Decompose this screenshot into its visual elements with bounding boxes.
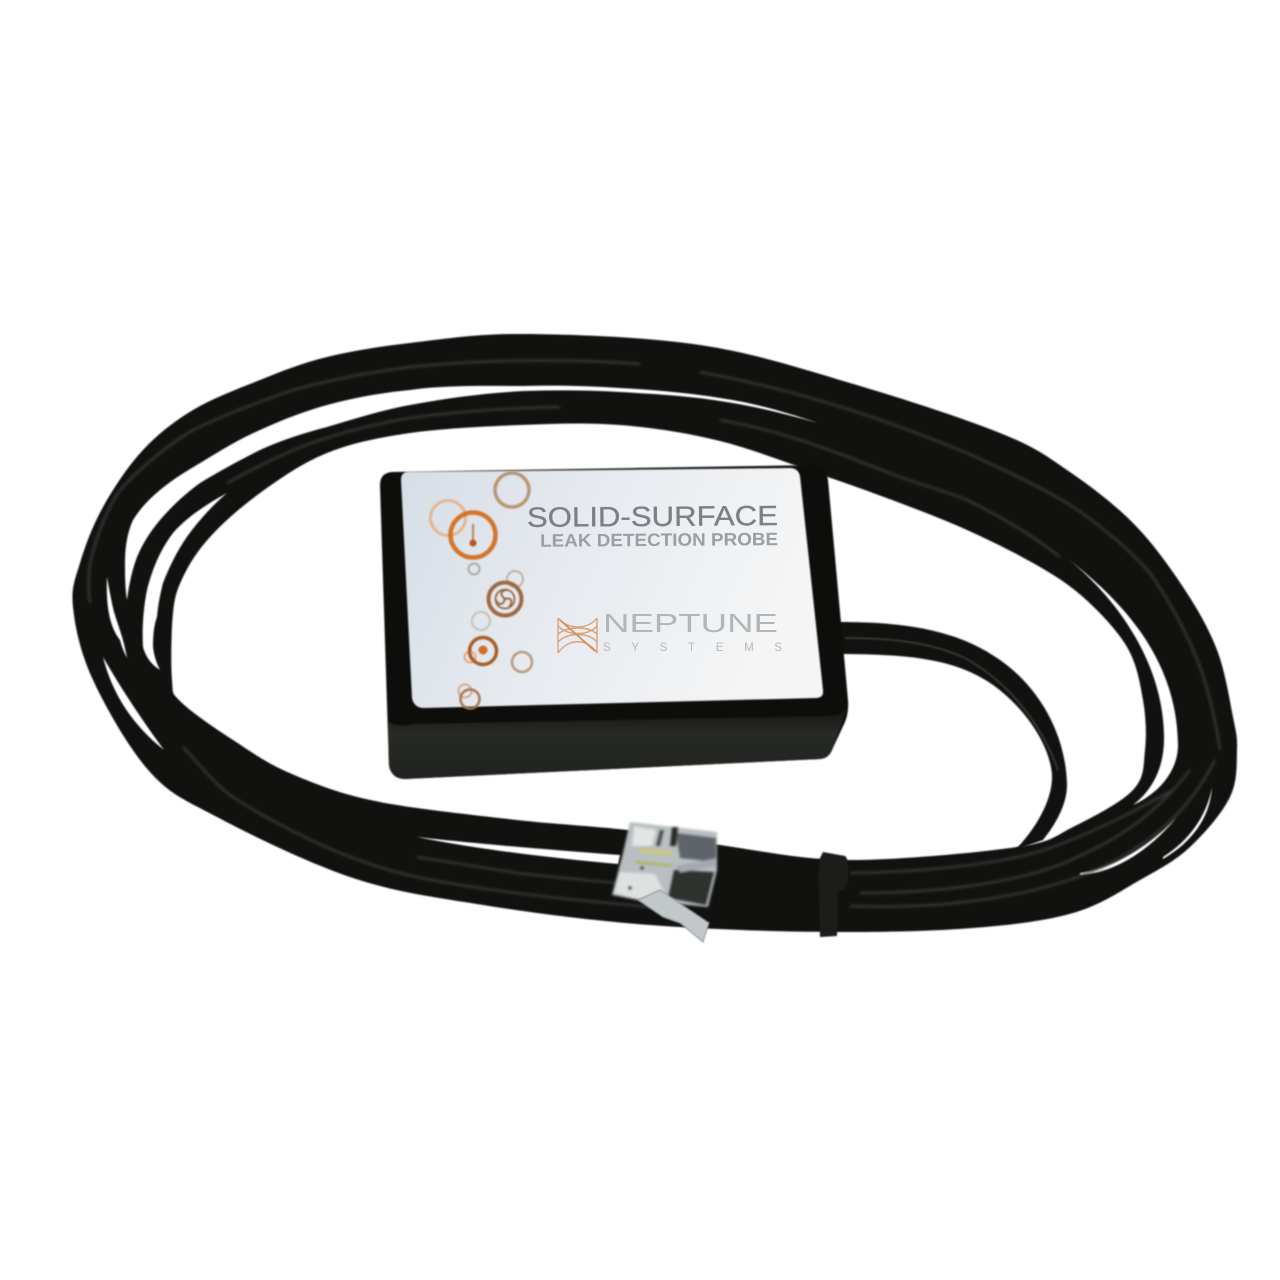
plug dark window — [668, 870, 714, 905]
label heading: SOLID-SURFACE — [527, 500, 778, 533]
housing body — [380, 465, 848, 779]
label heading — [527, 500, 778, 551]
plug body — [612, 822, 717, 907]
brand wordmark: SYSTEMS — [603, 642, 782, 654]
label heading: LEAK DETECTION PROBE — [540, 529, 778, 551]
printed label — [401, 468, 823, 708]
RJ connector plug — [612, 822, 717, 907]
white gaps between cable strands — [103, 386, 1212, 875]
flat cable loop leaving the probe — [838, 622, 1067, 850]
icon: light bulb in ring — [470, 638, 496, 664]
coiled black cable bundle — [72, 334, 1237, 932]
brand wordmark — [603, 608, 782, 654]
icon: brand wave logo — [558, 618, 597, 653]
brand wordmark: NEPTUNE — [603, 608, 778, 638]
plug wires — [640, 851, 672, 853]
icon: fan in ring — [488, 582, 522, 616]
probe housing — [380, 465, 848, 779]
housing front face — [388, 708, 847, 779]
cable sheen lines — [88, 360, 1220, 907]
plug latch tab — [638, 890, 709, 942]
cable tie — [819, 852, 848, 937]
icon: thermometer in ring — [450, 512, 496, 558]
decorative orange bubbles and icons — [430, 473, 532, 708]
